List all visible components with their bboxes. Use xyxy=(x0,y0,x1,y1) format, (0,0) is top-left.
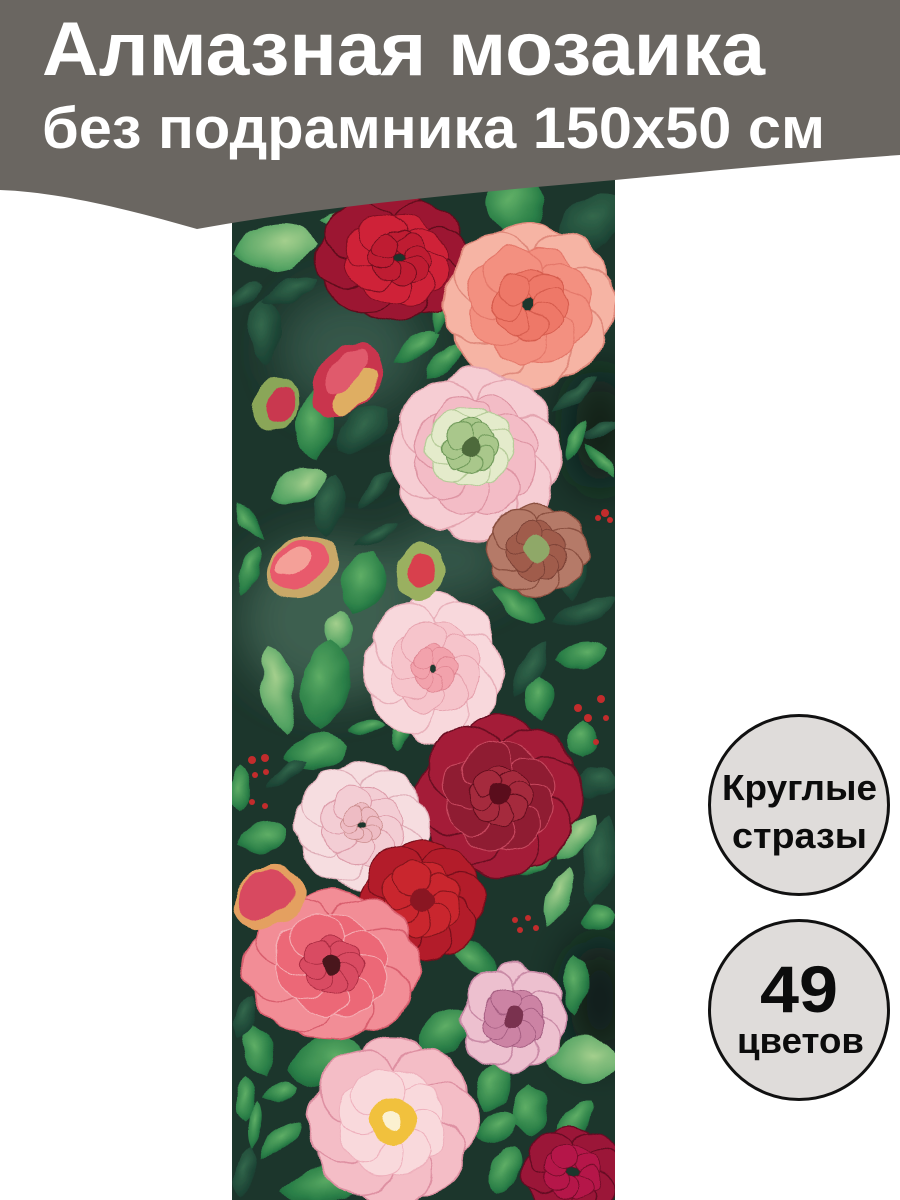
badge: 49 colours: цветов xyxy=(737,1020,864,1061)
badge: 49 colours xyxy=(710,920,888,1100)
flower: pink ranunculus xyxy=(239,885,425,1045)
flower: open pink rose with yellow stamens xyxy=(304,1034,480,1200)
badge: round rhinestones xyxy=(710,716,888,894)
flower: pink peony with green centre xyxy=(385,364,567,546)
flower: red rose top xyxy=(313,198,466,321)
flower: lilac-pink ranunculus xyxy=(458,961,568,1075)
flower: white-pink ranunculus xyxy=(291,759,433,891)
flower buds xyxy=(220,329,453,943)
flower: magenta bottom corner xyxy=(520,1125,615,1200)
badge: round rhinestones: Круглые xyxy=(722,767,877,808)
leaves: middle group xyxy=(230,545,619,861)
flower: dark red rose xyxy=(356,836,488,964)
title: Алмазная мозаика xyxy=(42,7,766,92)
flower: crimson ranunculus xyxy=(414,712,586,880)
flower: coral peony xyxy=(439,219,621,391)
leaves and flowers layer xyxy=(232,186,615,1200)
red berries xyxy=(248,509,613,933)
banner: dark grey title ribbon xyxy=(0,0,900,229)
badge: 49 colours: 49 xyxy=(760,952,838,1026)
leaves: lower group xyxy=(228,803,623,1200)
flower: dusty ranunculus xyxy=(484,501,590,599)
badge: round rhinestones: стразы xyxy=(732,815,867,856)
flower: pale pink rose xyxy=(361,588,507,748)
subtitle: без подрамника 150х50 см xyxy=(42,96,825,161)
leaves: upper group xyxy=(223,168,637,598)
panel: floral mosaic picture xyxy=(220,165,637,1200)
